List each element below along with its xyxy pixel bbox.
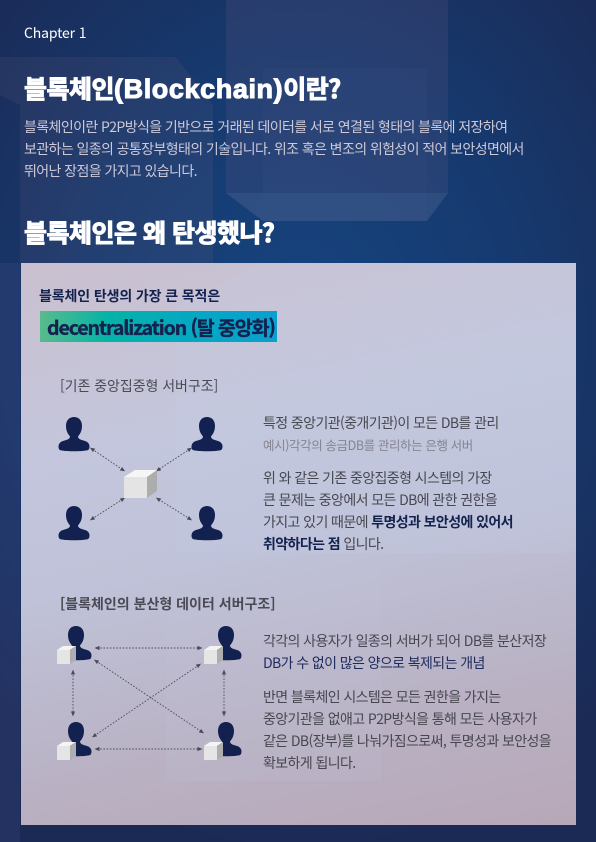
subheading: main purpose: 블록체인 탄생의 가장 큰 목적은 [39, 286, 220, 306]
intro paragraph: 블록체인이란 P2P방식을 기반으로 거래된 데이터를 서로 연결된 형태의 블록에 저장하여 [24, 117, 507, 137]
text: distributed description [263, 631, 546, 673]
panel: content [21, 263, 576, 825]
arrows [73, 648, 224, 749]
text: centralized problem: 가지고 있기 때문에 투명성과 보안성에 있어서 [263, 512, 513, 532]
central server cube [124, 470, 157, 498]
label: centralized server structure: [기존 중앙집중형 서버구조] [60, 376, 218, 396]
highlight banner: decentralization: decentralization (탈 중앙화) [47, 312, 275, 341]
arrows [92, 449, 190, 519]
intro paragraph [24, 117, 524, 181]
text: distributed benefit: 중앙기관을 없애고 P2P방식을 통해 모든 사용자가 [263, 709, 537, 729]
person icons [58, 417, 222, 540]
text: centralized description: 특정 중앙기관(중개기관)이 모든 DB를 관리 [263, 413, 499, 433]
text: distributed description: DB가 수 없이 많은 양으로 복제되는 개념 [263, 653, 485, 673]
text: centralized description: 예시)각각의 송금DB를 관리하는 은행 서버 [263, 435, 473, 454]
intro paragraph: 뛰어난 장점을 가지고 있습니다. [24, 161, 197, 181]
text: distributed benefit: 반면 블록체인 시스템은 모든 권한을 가지는 [263, 687, 501, 707]
chapter label: Chapter 1 [24, 23, 86, 43]
text: centralized problem: 큰 문제는 중앙에서 모든 DB에 관한 권한을 [263, 490, 497, 510]
text: distributed benefit: 같은 DB(장부)를 나눠가짐으로써, 투명성과 보안성을 [263, 731, 551, 751]
text: centralized description [263, 413, 499, 454]
panel texture [21, 263, 576, 825]
intro paragraph: 보관하는 일종의 공통장부형태의 기술입니다. 위조 혹은 변조의 위험성이 적어 보안성면에서 [24, 139, 524, 159]
text: centralized problem: 위 와 같은 기존 중앙집중형 시스템의 가장 [263, 468, 492, 488]
text: centralized problem: 취약하다는 점 입니다. [263, 534, 383, 554]
title: what is blockchain: 블록체인(Blockchain)이란? [24, 70, 341, 106]
text: distributed benefit: 확보하게 됩니다. [263, 753, 356, 773]
heading: why blockchain was born: 블록체인은 왜 탄생했나? [24, 214, 274, 250]
nodes [57, 626, 242, 760]
text: distributed benefit [263, 687, 551, 773]
text: centralized problem [263, 468, 513, 554]
text: distributed description: 각각의 사용자가 일종의 서버가 되어 DB를 분산저장 [263, 631, 546, 651]
label: distributed server structure: [블록체인의 분산형 데이터 서버구조] [60, 594, 276, 614]
